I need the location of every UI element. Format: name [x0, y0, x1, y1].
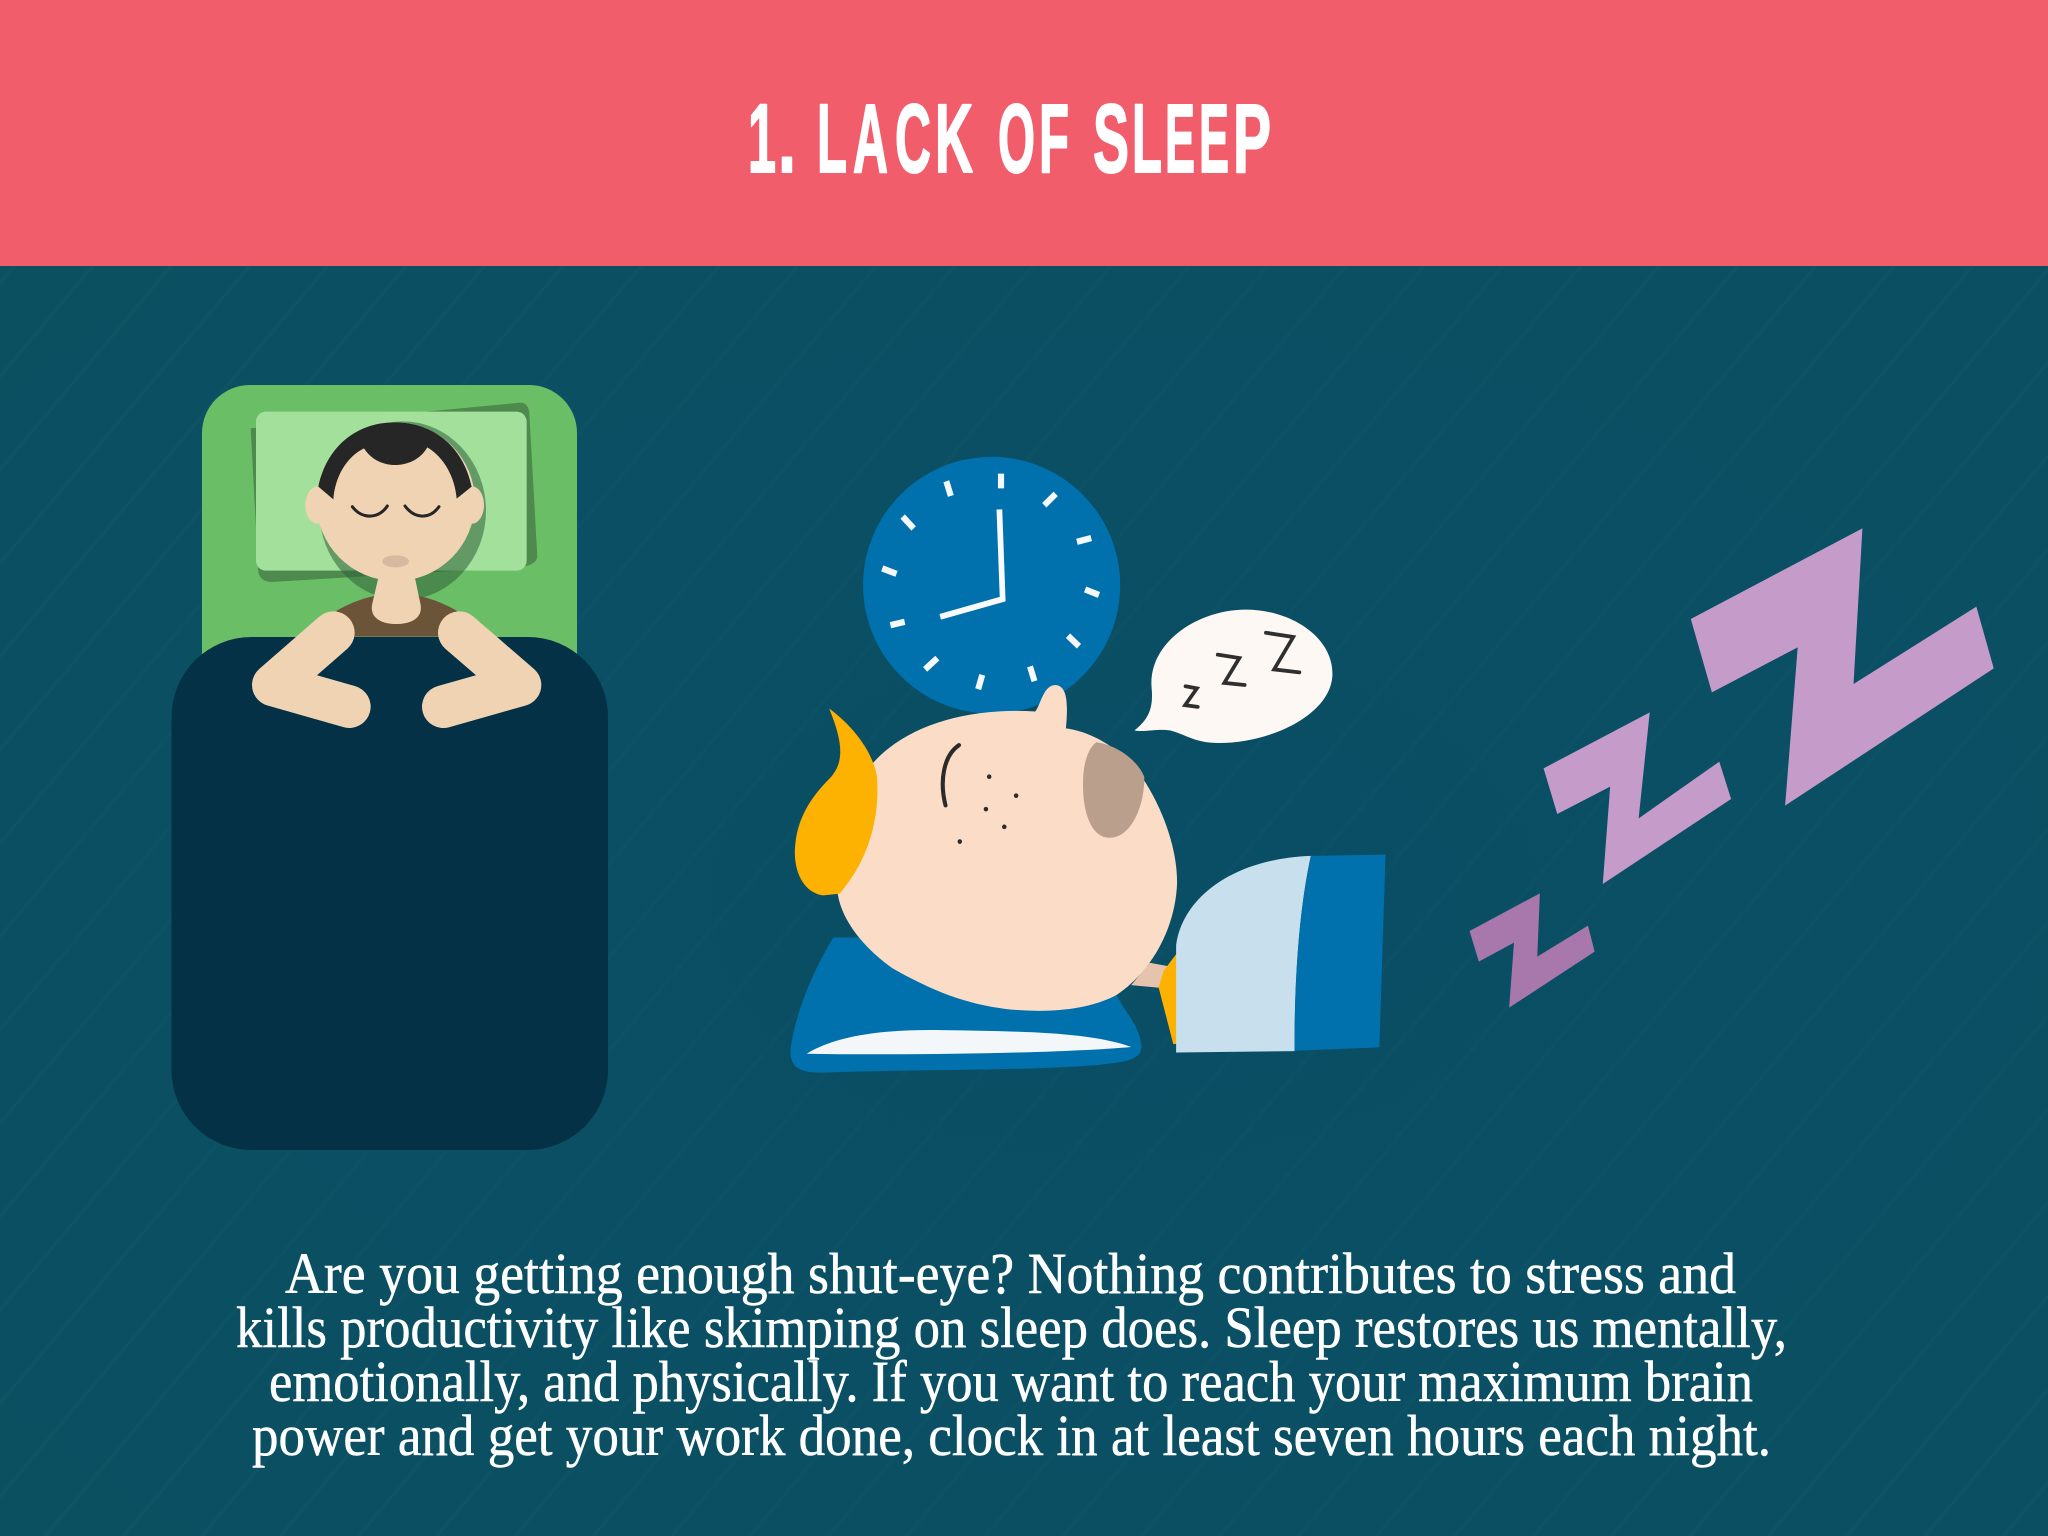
hair — [795, 709, 877, 895]
speech bubble — [1134, 610, 1332, 743]
title: L — [1132, 84, 1162, 193]
ear patch — [1083, 742, 1144, 838]
title: L — [817, 84, 847, 193]
title: 1 — [748, 84, 776, 193]
title: A — [853, 84, 888, 193]
face — [316, 422, 475, 581]
illustration: person sleeping in bed — [172, 385, 608, 1150]
header banner — [0, 0, 2048, 266]
title: . — [778, 84, 796, 193]
title: P — [1233, 84, 1271, 193]
title: C — [895, 84, 931, 193]
body text — [236, 1241, 1787, 1468]
shirt — [333, 594, 460, 637]
title: E — [1165, 84, 1195, 193]
pillow — [790, 938, 1141, 1073]
title: S — [1093, 84, 1129, 193]
title: F — [1039, 84, 1069, 193]
head — [836, 685, 1177, 1011]
title: O — [998, 84, 1035, 193]
body text: kills productivity like skimping on sleep does. Sleep restores us mentally, — [236, 1295, 1787, 1360]
ears — [305, 486, 484, 524]
body text: emotionally, and physically. If you want to reach your maximum brain — [269, 1349, 1753, 1414]
body text: power and get your work done, clock in at least seven hours each night. — [252, 1403, 1771, 1468]
large purple Z letters — [1470, 528, 1994, 1008]
body text: Are you getting enough shut-eye? Nothing contributes to stress and — [285, 1241, 1736, 1306]
arms — [273, 633, 520, 707]
eye and freckles — [943, 745, 1018, 844]
headboard — [202, 385, 577, 700]
blanket — [172, 637, 608, 1150]
pillow — [256, 412, 527, 571]
neck and collar — [1131, 947, 1182, 1044]
illustration: clock and sleeping man — [790, 457, 1386, 1073]
mouth — [382, 555, 409, 567]
neck — [372, 573, 421, 624]
title: K — [935, 84, 973, 193]
title: E — [1199, 84, 1229, 193]
eyes — [352, 506, 439, 516]
hair — [318, 422, 472, 499]
clock — [863, 457, 1120, 714]
blanket — [1176, 855, 1386, 1052]
title — [748, 84, 1271, 193]
head shadow — [319, 421, 486, 600]
pillow shadow — [251, 403, 537, 582]
